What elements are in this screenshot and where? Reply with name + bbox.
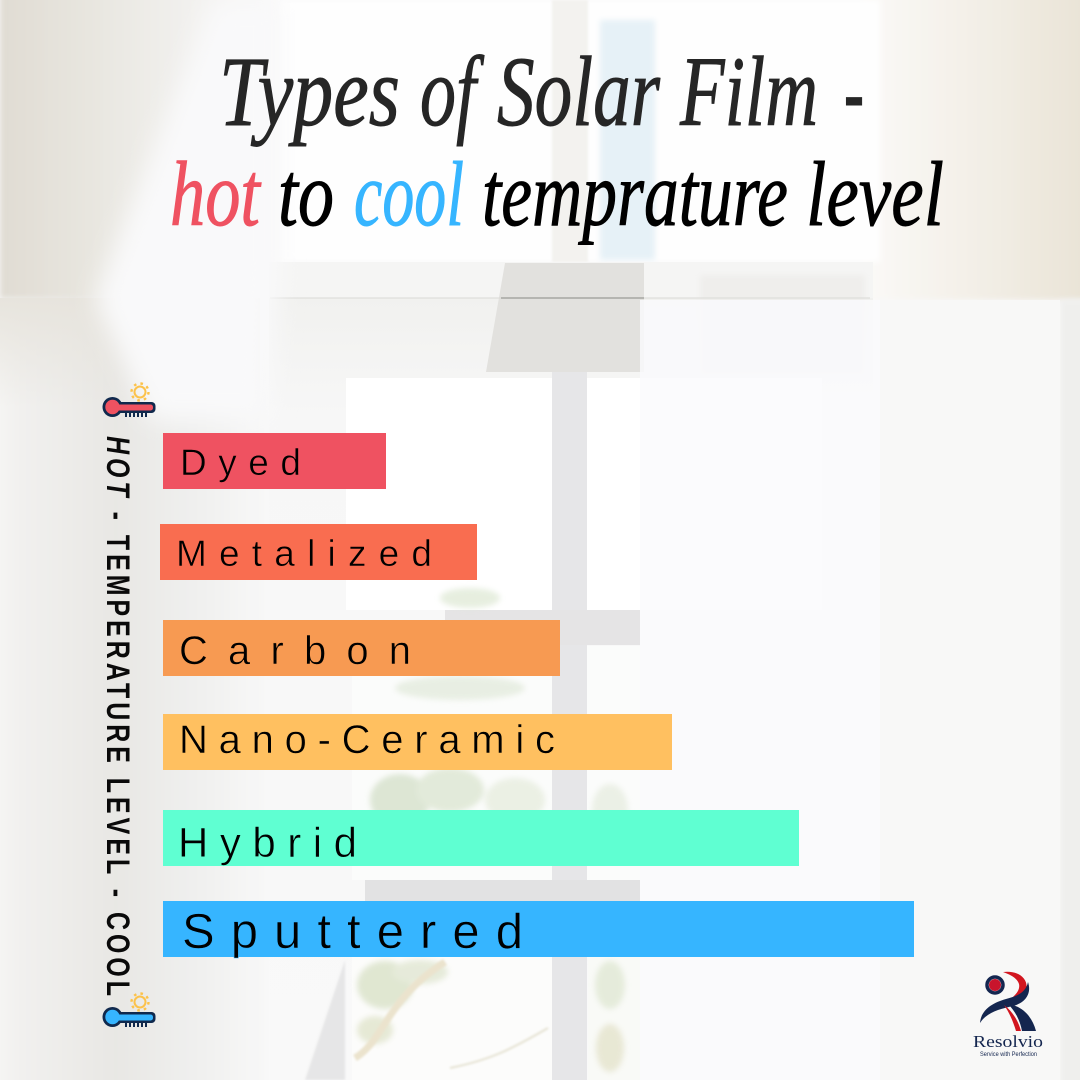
- title line 2: hot to cool temprature level: temprature: [482, 143, 788, 245]
- bar: Hybrid: [163, 810, 799, 866]
- title line 2: hot to cool temprature level: to: [278, 143, 334, 245]
- title line 2: hot to cool temprature level: [170, 143, 944, 245]
- title: [170, 36, 944, 245]
- bar: Dyed: Dyed: [180, 442, 301, 483]
- logo: Resolvio: Resolvio: [973, 1032, 1043, 1051]
- icon: hot thermometer: [102, 384, 156, 417]
- icon: cool thermometer: [102, 994, 156, 1027]
- logo: Resolvio: [973, 972, 1043, 1058]
- title line 1: Types of Solar Film -: of: [420, 36, 485, 147]
- bar: Dyed: [163, 433, 386, 489]
- logo mark: [980, 972, 1036, 1031]
- title line 1: Types of Solar Film -: Film: [679, 36, 818, 147]
- bar: Metalized: [160, 524, 477, 580]
- title line 1: Types of Solar Film -: [219, 36, 864, 147]
- title line 2: hot to cool temprature level: cool: [354, 143, 464, 245]
- title line 1: Types of Solar Film -: Types: [219, 36, 400, 147]
- foliage: [357, 588, 628, 1072]
- icon: sun: [132, 384, 148, 400]
- bar: Carbon: [163, 620, 560, 676]
- vertical axis label: HOT - TEMPERATURE LEVEL - COOL: [99, 436, 135, 996]
- bar: Hybrid: Hybrid: [178, 819, 357, 866]
- bar: Sputtered: [163, 901, 914, 959]
- bar: Metalized: Metalized: [176, 533, 432, 574]
- title line 2: hot to cool temprature level: hot: [170, 143, 262, 245]
- bar: Nano-Ceramic: [163, 714, 672, 770]
- icon: sun: [132, 994, 148, 1010]
- title line 2: hot to cool temprature level: level: [806, 143, 944, 245]
- bar: Sputtered: Sputtered: [182, 905, 523, 959]
- bar: Nano-Ceramic: Nano-Ceramic: [179, 718, 555, 762]
- logo: Resolvio: Service with Perfection: [980, 1052, 1037, 1058]
- bar: Carbon: Carbon: [179, 629, 411, 673]
- title line 1: Types of Solar Film -: Solar: [497, 36, 661, 147]
- title line 1: Types of Solar Film -: -: [844, 36, 864, 147]
